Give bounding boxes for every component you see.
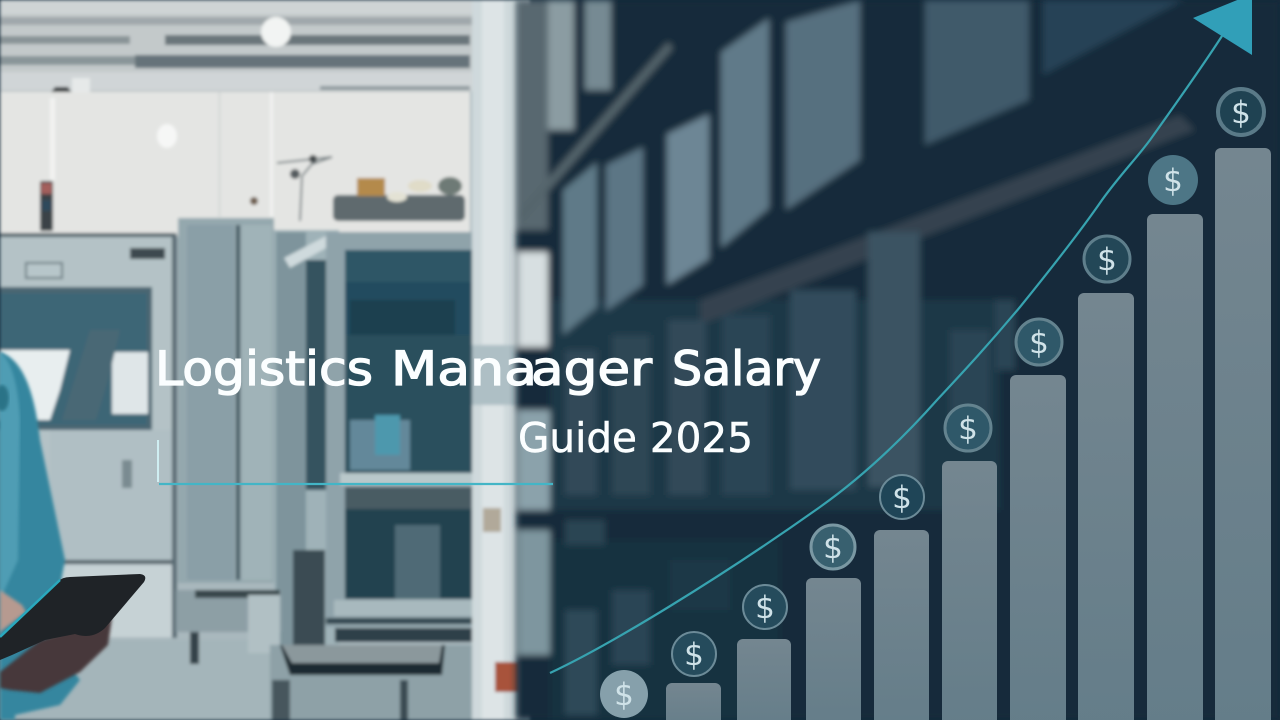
title: Salary xyxy=(672,342,821,397)
dollar coin icons: $ xyxy=(892,480,912,516)
coat xyxy=(0,352,80,720)
dollar coin icons: $ xyxy=(1029,325,1049,361)
background: factory floor photo xyxy=(0,0,530,720)
diagonal steel xyxy=(516,42,673,222)
upper storage boxes xyxy=(563,162,597,335)
title underline accent xyxy=(158,440,553,484)
title xyxy=(155,342,821,397)
title: Mana xyxy=(391,342,537,397)
title: Logistics xyxy=(155,342,373,397)
lower storage boxes xyxy=(565,350,597,495)
dollar coin icons: $ xyxy=(823,530,843,566)
subtitle: Guide 2025 xyxy=(518,414,753,462)
centre column panels xyxy=(178,218,339,650)
bar chart: rising salary bars xyxy=(666,148,1271,720)
white steel column xyxy=(472,0,520,720)
person holding tablet xyxy=(0,352,145,720)
back wall xyxy=(0,92,470,237)
ceiling xyxy=(0,0,475,100)
trend arrow line and head xyxy=(550,0,1252,673)
wall details xyxy=(40,92,465,231)
dollar coin icons: $ xyxy=(958,411,978,447)
hand xyxy=(0,618,112,693)
dollar coin icons: $ xyxy=(755,590,775,626)
title: ager xyxy=(531,342,653,397)
low conveyor xyxy=(176,550,475,720)
dollar coin icons: $ xyxy=(1231,95,1251,131)
dollar coin icons xyxy=(600,89,1264,718)
rust beam xyxy=(700,115,1195,325)
dollar coin icons: $ xyxy=(614,677,634,713)
right window frame machine xyxy=(326,232,472,627)
dollar coin icons: $ xyxy=(684,637,704,673)
floor xyxy=(0,640,280,720)
dollar coin icons: $ xyxy=(1097,242,1117,278)
mid-tone rack backdrop xyxy=(550,300,1000,510)
tablet xyxy=(0,574,145,660)
background: warehouse racking xyxy=(516,0,1280,720)
left machine cabinet xyxy=(0,233,177,638)
dollar coin icons: $ xyxy=(1163,163,1183,199)
